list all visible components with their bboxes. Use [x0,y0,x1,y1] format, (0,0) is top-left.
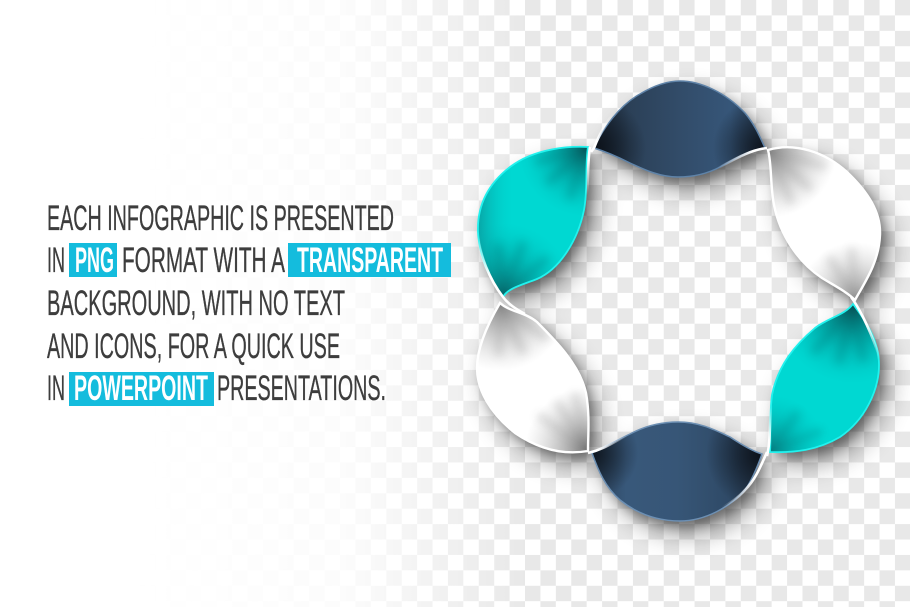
text block: description: IN [47,369,65,408]
text block: description: AND ICONS, FOR A QUICK USE [47,327,340,366]
petal: white lower left [477,303,588,452]
text block: description: FORMAT WITH A [122,241,285,280]
petal: navy top [594,81,765,177]
wide drop shadow [487,94,890,534]
text block: description: EACH INFOGRAPHIC IS PRESENTED [47,199,394,238]
petal: teal lower right [770,304,879,452]
highlight: PNG: PNG [75,241,114,280]
white ribbon crossings [478,110,879,509]
text block: description [47,199,451,408]
text block: description: BACKGROUND, WITH NO TEXT [47,284,345,323]
background: transparency checkerboard [388,0,910,607]
text block: description: IN [47,241,65,280]
highlight: TRANSPARENT [288,241,451,280]
highlight: POWERPOINT: POWERPOINT [74,369,208,408]
highlight: TRANSPARENT: TRANSPARENT [297,241,443,280]
text block: description: PRESENTATIONS. [217,369,386,408]
petal: teal upper left [478,147,588,297]
petal: navy bottom [592,422,762,521]
tight drop shadow [482,87,885,527]
highlight: PNG [69,241,117,280]
highlight: POWERPOINT [69,369,214,408]
diagram: six-petal ring [477,81,890,534]
petal: white upper right [768,147,880,300]
